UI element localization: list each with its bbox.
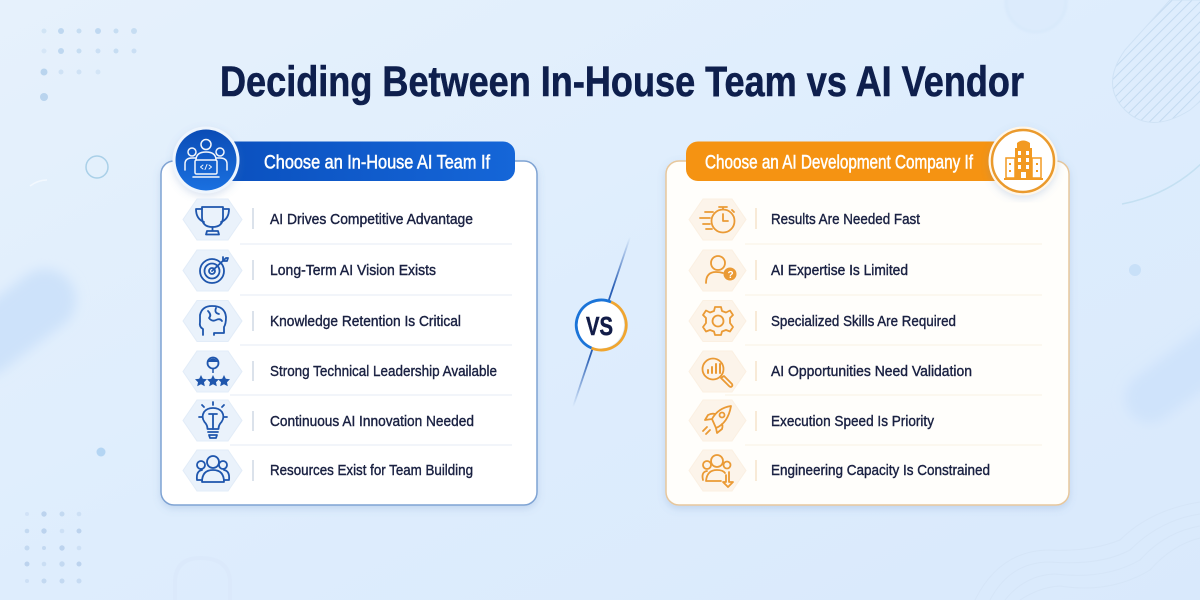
title: Deciding Between In-House Team vs AI Vendor (220, 58, 1024, 106)
icon: group of people (197, 456, 229, 482)
row 3: Specialized Skills Are Required (771, 313, 956, 330)
panel: in-house AI team (161, 126, 537, 505)
row 6 (689, 450, 990, 491)
icon: office building badge (988, 126, 1058, 196)
panel header banner: Choose an In-House AI Team If (264, 152, 491, 174)
panel card (666, 161, 1069, 505)
diagonal line (573, 237, 630, 407)
icon: stopwatch with speed lines (700, 207, 734, 232)
panel: AI development company (666, 126, 1069, 505)
row 4: AI Opportunities Need Validation (771, 363, 972, 380)
row 3 (689, 300, 956, 342)
row 1 (689, 199, 921, 240)
row 3: Knowledge Retention Is Critical (270, 313, 461, 330)
row 4: Strong Technical Leadership Available (270, 363, 497, 380)
row 2 (689, 250, 908, 291)
row 1: AI Drives Competitive Advantage (270, 211, 473, 228)
icon: team with laptop badge (172, 126, 240, 194)
row 2: ? (728, 270, 734, 281)
dot grid top-left (40, 28, 137, 101)
row 6 (183, 450, 473, 491)
row 1: Results Are Needed Fast (771, 211, 921, 228)
icon: team with down arrow (702, 455, 733, 487)
row 5: Execution Speed Is Priority (771, 413, 934, 430)
icon: head with globe (200, 306, 226, 335)
row 3 (183, 300, 461, 342)
panel header banner: Choose an AI Development Company If (705, 152, 974, 174)
icon: trophy (196, 207, 229, 234)
row 4 (689, 351, 972, 392)
icon: rocket (703, 406, 731, 434)
icon: target (200, 257, 228, 283)
VS badge (576, 300, 626, 350)
row 2 (183, 250, 436, 291)
row 2: AI Expertise Is Limited (771, 262, 908, 279)
row 1 (183, 199, 473, 240)
icon: gear (703, 307, 733, 335)
row 5 (689, 400, 934, 441)
icon: magnifier with chart (702, 358, 732, 387)
icon: leader with stars (195, 358, 230, 386)
row 6: Resources Exist for Team Building (270, 462, 473, 479)
row 4 (183, 351, 497, 392)
VS badge: VS (586, 311, 613, 341)
icon: light bulb (199, 402, 227, 438)
panel card (161, 161, 537, 505)
dot grid bottom-left (24, 511, 82, 584)
row 5 (183, 400, 474, 441)
icon: person with question mark (706, 256, 725, 283)
VS divider (573, 237, 630, 407)
row 2: Long-Term AI Vision Exists (270, 262, 436, 279)
panel header banner (686, 142, 1011, 181)
row 6: Engineering Capacity Is Constrained (771, 462, 990, 479)
row 5: Continuous AI Innovation Needed (270, 413, 474, 430)
panel header banner (205, 142, 515, 181)
